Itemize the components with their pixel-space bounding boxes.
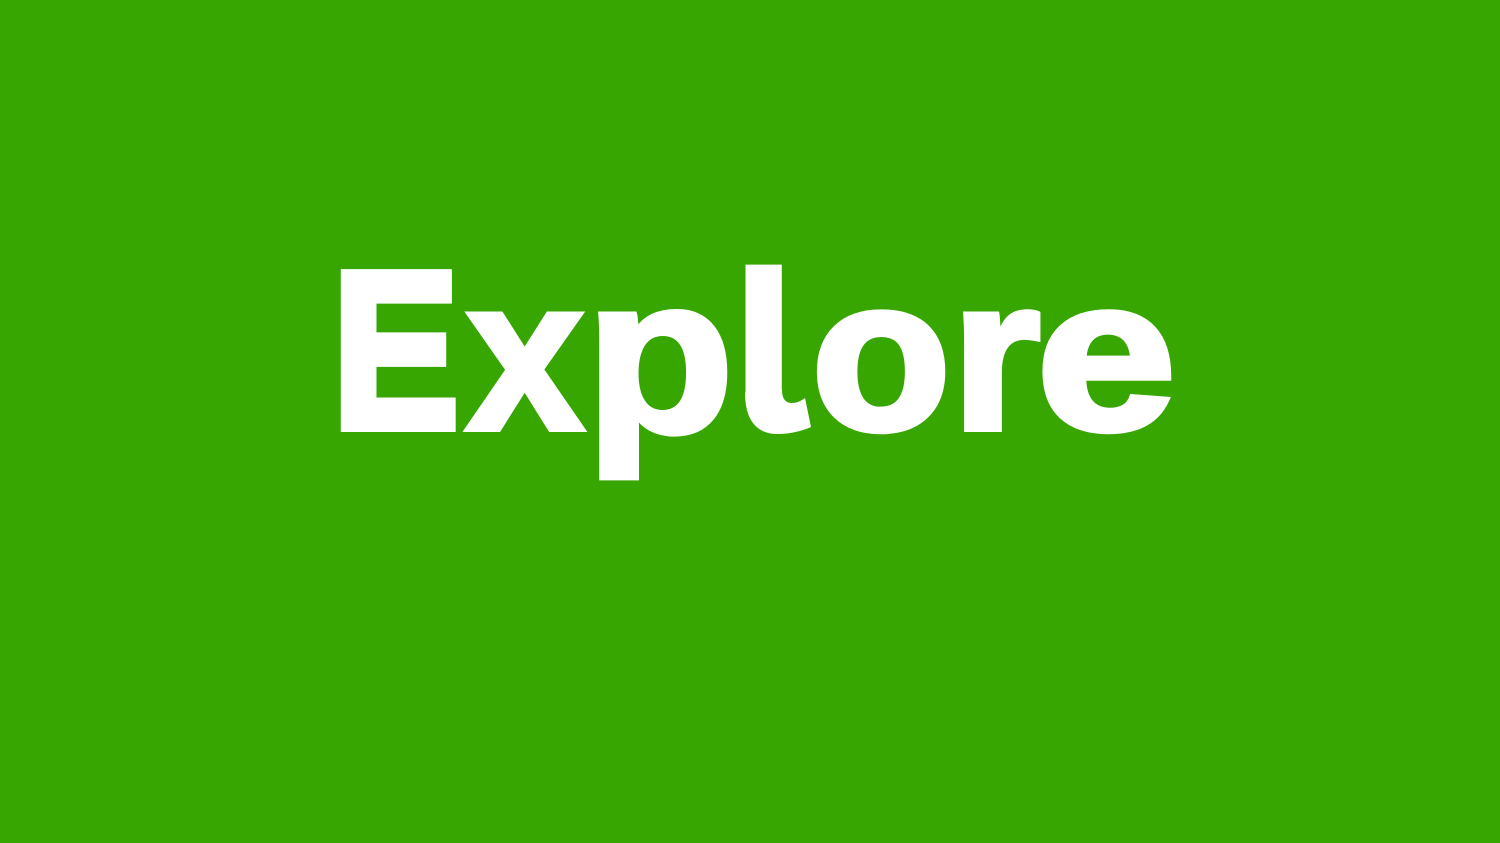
title: Explore: x: [466, 233, 584, 476]
title: Explore: o: [812, 235, 950, 474]
title: Explore: e: [1036, 233, 1176, 475]
title: Explore: l: [731, 233, 796, 437]
title: Explore: r: [951, 232, 1041, 476]
title: Explore: p: [585, 232, 734, 479]
title: Explore: E: [332, 226, 459, 474]
